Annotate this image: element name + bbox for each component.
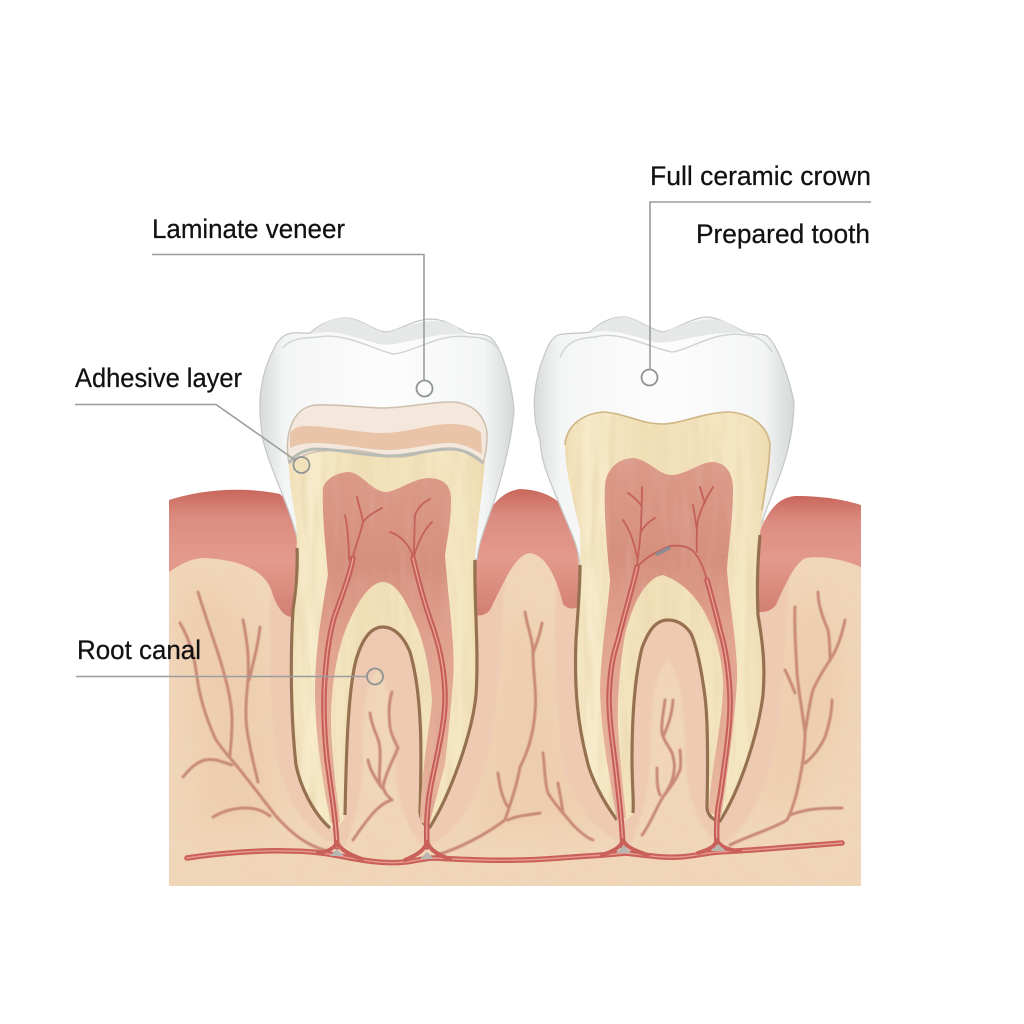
vessel junction markers (330, 844, 726, 859)
soft tissue halo around left root (270, 560, 506, 848)
callout: adhesive layer (75, 363, 310, 473)
pulp: left (315, 472, 454, 824)
gum: middle (470, 489, 582, 615)
callout: laminate veneer: Laminate veneer (152, 214, 345, 244)
veneer adhesive band (290, 424, 482, 454)
soft tissue halo around right root (555, 560, 790, 846)
pulp nerves: right (623, 487, 713, 580)
dental anatomy diagram (74, 165, 871, 886)
crown cusp ridge: right (560, 334, 772, 358)
pulp nerves: left (345, 497, 432, 560)
callout: root canal: Root canal (77, 635, 201, 665)
crown cusp ridge: left (283, 336, 500, 354)
panel: jaw bone (169, 520, 861, 886)
gum: right (755, 496, 861, 612)
callout: full ceramic crown: Full ceramic crown (650, 161, 871, 191)
dentin: right (560, 405, 775, 825)
tooth: left (260, 318, 514, 847)
callout: root canal (76, 635, 383, 684)
gray nerve fragment (657, 548, 669, 554)
root outline: left (291, 548, 477, 828)
crown: left (260, 318, 514, 560)
gum: left (169, 490, 305, 617)
crown: right (534, 317, 794, 565)
callout: adhesive layer: Adhesive layer (75, 363, 242, 393)
main blood vessel (187, 840, 842, 863)
root canal vessels: left (324, 558, 445, 847)
bone vessels (180, 592, 845, 855)
pulp: right (595, 455, 745, 823)
tooth: right (534, 317, 794, 847)
callout: full ceramic crown (642, 161, 871, 386)
callout: laminate veneer (152, 214, 432, 396)
callout: prepared tooth: Prepared tooth (696, 219, 870, 249)
veneer (287, 402, 487, 463)
root outline: right (575, 535, 764, 821)
panel: gum tissue (169, 489, 861, 617)
root canal vessels: right (609, 567, 730, 847)
dentin: left (288, 450, 485, 828)
